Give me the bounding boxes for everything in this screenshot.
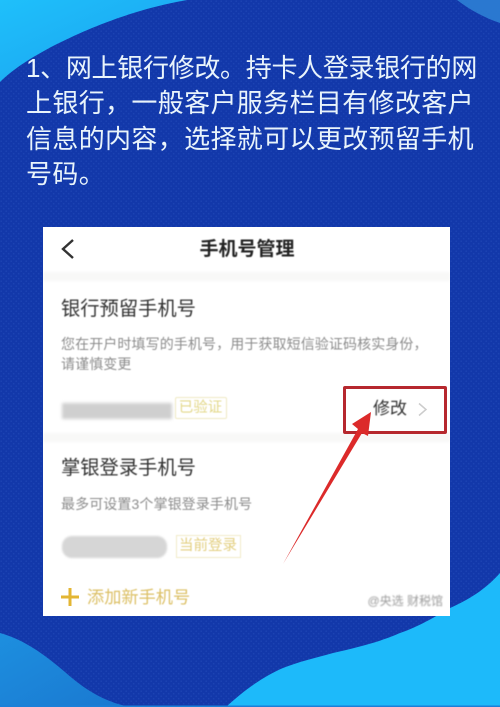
red highlight box [343,386,447,434]
screen title: 手机号管理 [200,239,295,260]
heading text block [26,53,477,189]
heading text block: 信息的内容，选择就可以更改预留手机 [26,124,474,154]
section description: 您在开户时填写的手机号，用于获取短信验证码核实身份， [61,336,428,352]
login description: 最多可设置3个掌银登录手机号 [61,496,252,512]
icon: chevron right [418,403,427,416]
panel: phone screenshot [42,227,450,616]
heading text block: 上银行，一般客户服务栏目有修改客户 [26,88,474,118]
heading text block: 1、网上银行修改。持卡人登录银行的网 [26,53,477,83]
edit label: 修改 [373,399,407,418]
blurred login number [62,536,166,558]
blurred phone number [62,403,172,419]
divider band [42,272,450,281]
section heading: login phone: 掌银登录手机号 [61,458,196,478]
tag: verified: 已验证 [179,400,222,416]
icon: plus [61,588,79,606]
tag: current login: 当前登录 [179,538,237,554]
section heading: bank phone: 银行预留手机号 [61,298,196,320]
icon: back chevron [61,239,74,259]
heading text block: 号码。 [26,159,105,189]
tag: verified [174,397,226,419]
section description line 2: 请谨慎变更 [61,356,132,372]
add phone link: 添加新手机号 [87,586,190,606]
tag: current login [176,535,240,558]
watermark: @央选 财税馆 [368,594,443,608]
divider band [42,433,450,442]
